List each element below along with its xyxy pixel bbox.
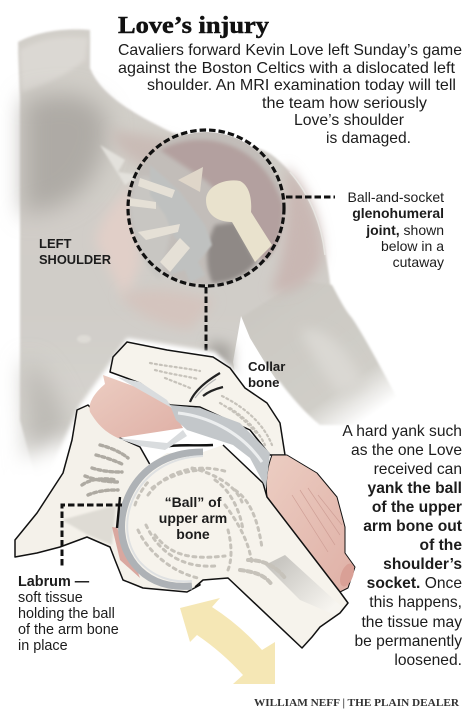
label: labrum [18,574,119,654]
black fork in the capsule [190,373,223,402]
label: collar bone: Collar [248,359,285,374]
intro text: against the Boston Celtics with a dislocated left [118,60,456,77]
rib struts [130,178,190,272]
armpit gap [233,316,290,398]
label: left shoulder: SHOULDER [39,252,112,267]
joint capsule band [170,405,270,488]
shoulder blade [15,405,200,592]
forearm highlight [300,329,365,395]
shoulder rim light [290,172,325,255]
label: glenohumeral joint: Ball-and-socket [348,189,444,205]
label: glenohumeral joint: below in a [381,238,444,254]
connector: to cutaway [204,287,208,357]
spongy bone texture [82,363,285,585]
socket cartilage arc [122,452,203,586]
explanatory text: shoulder’s [383,556,462,573]
intro text: is damaged. [326,130,411,147]
socket outer black edge [117,497,120,528]
axilla shadow [207,222,256,283]
tendon [100,145,140,185]
label: ball of upper arm bone [159,494,227,542]
label: ball of upper arm bone: bone [176,526,210,542]
label: left shoulder: LEFT [39,236,72,251]
shoulder cutaway illustration [10,338,360,655]
label: labrum: Labrum — [18,574,90,590]
explanatory text: loosened. [394,652,462,669]
explanatory text: socket. Once [367,575,462,592]
left capsule band [117,377,187,450]
nipple [77,335,91,343]
explanatory text: be permanently [354,633,462,650]
credit: WILLIAM NEFF | THE PLAIN DEALER [254,697,460,709]
neck shadow [24,94,107,215]
explanatory text [342,423,462,669]
lower left fade [0,440,90,520]
label: glenohumeral joint: glenohumeral [352,205,444,221]
label: labrum: of the arm bone [18,622,119,638]
double arrow [180,598,275,684]
right deltoid muscle [266,455,355,592]
chest muscle [95,185,140,300]
explanatory text: arm bone out [363,518,462,535]
torso illustration [0,29,412,520]
explanatory text: yank the ball [368,480,462,497]
explanatory text: of the [420,537,462,554]
deltoid muscle [160,140,283,262]
label: labrum: holding the ball [18,606,115,622]
blade grey shading [62,505,116,545]
connector: labrum [62,505,122,568]
explanatory text: received can [374,461,462,478]
trapezius muscle [110,130,200,170]
intro text: Cavaliers forward Kevin Love left Sunday’s game [118,42,462,59]
muscle tip [337,562,357,588]
explanatory text: as the one Love [351,442,462,459]
dashed circle [128,130,284,286]
labrum pink [112,527,140,578]
humerus bone [206,180,272,262]
label: ball of upper arm bone: upper arm [159,510,227,526]
acromion triangle [178,167,203,192]
explanatory text: of the upper [372,499,462,516]
connector: to joint label [286,196,335,198]
intro text: shoulder. An MRI examination today will tell [147,77,456,94]
title: Love’s injury [118,13,269,39]
upper arm bone [117,445,348,648]
explanatory text: the tissue may [361,614,462,631]
outer shoulder muscle [270,165,322,292]
left lit area [130,176,175,280]
label: labrum: soft tissue [18,590,83,606]
circled shoulder joint [128,130,284,286]
head and jaw [20,37,88,92]
intro text [118,42,462,147]
label: collar bone: bone [248,375,280,390]
upper muscle [90,375,183,438]
explanatory text: A hard yank such [342,423,462,440]
shaft shading [265,555,342,615]
label: glenohumeral joint: cutaway [393,254,444,270]
explanatory text: this happens, [369,594,462,611]
white halo [10,338,360,655]
label: labrum: in place [18,638,68,654]
scapula bone [150,165,212,283]
label: glenohumeral joint [348,189,444,270]
label: collar bone [248,359,285,390]
intro text: the team how seriously [262,95,427,112]
circle interior [130,132,282,284]
collar bone [110,342,285,455]
intro text: Love’s shoulder [294,112,404,129]
muscle fibres [292,488,342,552]
label: left shoulder [39,236,112,267]
label: glenohumeral joint: joint, shown [365,222,444,238]
label: ball of upper arm bone: “Ball” of [165,494,222,510]
